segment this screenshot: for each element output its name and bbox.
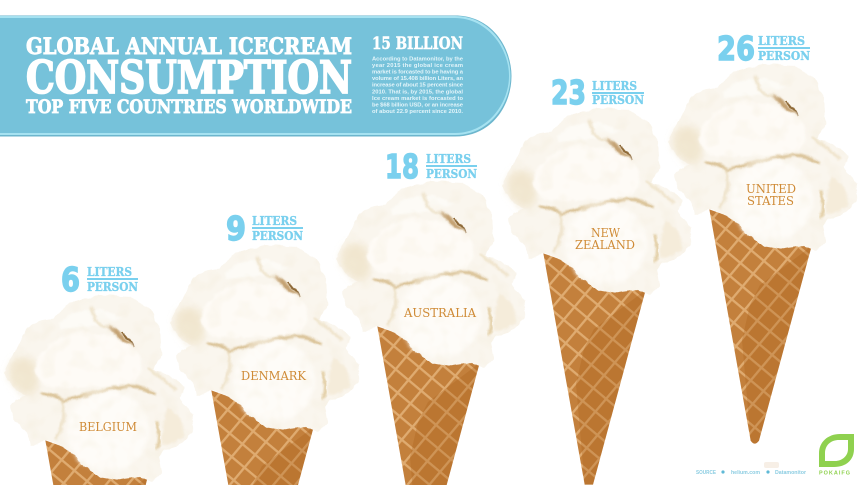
stat paragraph: volume of 15.408 billion Liters, an <box>372 76 463 82</box>
country label: United States <box>746 181 796 208</box>
title line 2: CONSUMPTION <box>26 51 352 104</box>
value label: 6 liters per person: PERSON <box>87 280 138 294</box>
country label: Belgium: BELGIUM <box>79 419 137 434</box>
title line 1: GLOBAL ANNUAL ICECREAM <box>26 34 352 60</box>
stat heading: 15 BILLION <box>372 34 463 53</box>
ice cream cone: Denmark <box>173 247 357 485</box>
value label: 26 liters per person: 26 <box>717 29 755 68</box>
stat paragraph: increase of about 15 percent since <box>372 83 464 89</box>
value label: 9 liters per person: PERSON <box>252 229 303 243</box>
source line <box>696 470 806 476</box>
value label: 23 liters per person: PERSON <box>592 93 644 107</box>
country label: United States: UNITED <box>746 181 796 196</box>
value label: 23 liters per person <box>551 73 644 112</box>
source line: helium.com <box>731 470 761 476</box>
stat paragraph <box>372 56 464 115</box>
country label: New Zealand: ZEALAND <box>575 237 635 252</box>
country label: New Zealand: NEW <box>591 225 620 240</box>
source line: Datamonitor <box>775 470 806 476</box>
value label: 6 liters per person: 6 <box>61 260 80 299</box>
faint smudge <box>764 462 779 468</box>
value label: 23 liters per person: LITERS <box>592 79 637 93</box>
ice cream cone: New Zealand <box>505 110 689 485</box>
value label: 18 liters per person <box>385 147 477 186</box>
value label: 18 liters per person: 18 <box>385 147 419 186</box>
value label: 18 liters per person: LITERS <box>426 152 471 166</box>
stat paragraph: 2010. That is, by 2015, the global <box>372 89 463 95</box>
value label: 6 liters per person: LITERS <box>87 265 132 279</box>
title banner <box>0 16 512 136</box>
stat paragraph: be $68 billion USD, or an increase <box>372 102 464 108</box>
value label: 23 liters per person: 23 <box>551 73 586 112</box>
stat paragraph: of about 22.9 percent since 2010. <box>372 109 463 115</box>
country label: Denmark: DENMARK <box>241 368 307 383</box>
value label: 18 liters per person: PERSON <box>426 167 477 181</box>
stat paragraph: market is forcasted to be having a <box>372 70 464 76</box>
source line: SOURCE <box>696 470 717 476</box>
value label: 9 liters per person: LITERS <box>252 214 297 228</box>
ice cream cone: Australia <box>339 183 523 485</box>
logo: Pokaifg: POKAIFG <box>819 470 850 476</box>
value label: 26 liters per person: LITERS <box>758 34 805 48</box>
country label: United States: STATES <box>747 193 794 208</box>
ice cream cone: United States <box>671 66 855 444</box>
value label: 9 liters per person: 9 <box>226 209 246 248</box>
country label: New Zealand <box>575 225 635 252</box>
value label: 26 liters per person: PERSON <box>758 49 810 63</box>
title line 3: TOP FIVE COUNTRIES WORLDWIDE <box>26 96 352 118</box>
value label: 9 liters per person <box>226 209 303 248</box>
ice cream cone: Belgium <box>7 297 191 485</box>
country label: Australia: AUSTRALIA <box>403 305 477 320</box>
logo: Pokaifg <box>819 434 854 476</box>
stat paragraph: year 2015 the global ice cream <box>372 63 463 69</box>
stat paragraph: According to Datamonitor, by the <box>372 56 464 62</box>
stat paragraph: Ice cream market is forcasted to <box>372 96 463 102</box>
value label: 6 liters per person <box>61 260 138 299</box>
value label: 26 liters per person <box>717 29 810 68</box>
